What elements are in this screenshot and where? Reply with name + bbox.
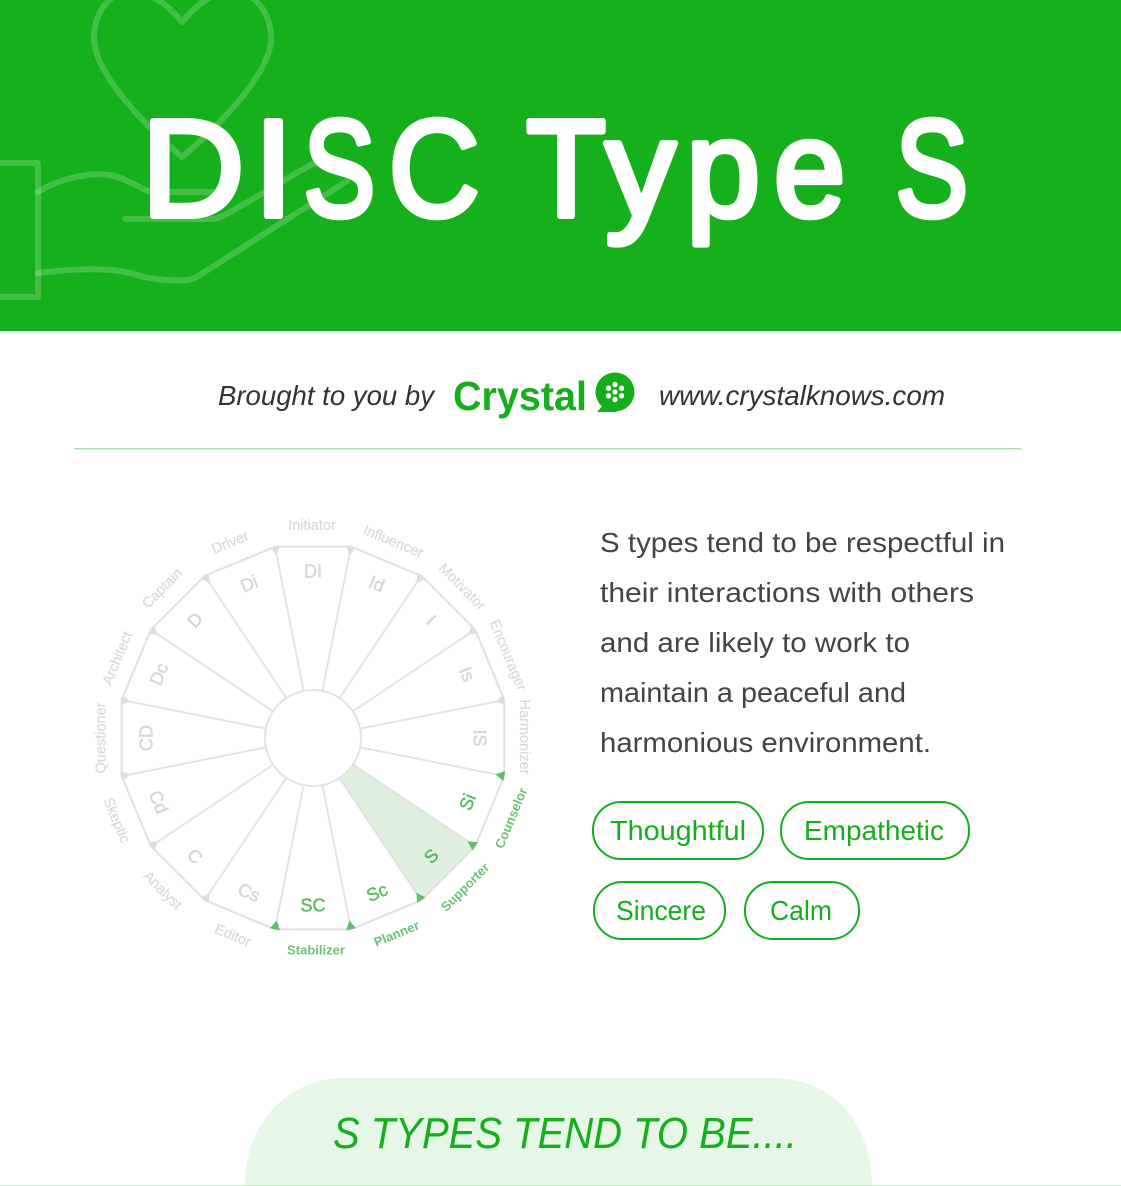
description paragraph: and are likely to work to (600, 627, 910, 658)
highlighted S segment (340, 765, 475, 900)
trait tag: Sincere (594, 882, 725, 939)
outer role labels: Encourager (486, 618, 529, 693)
header banner (0, 0, 1121, 331)
segment codes: Cs (235, 879, 263, 906)
trait tag: Calm: Calm (770, 895, 832, 926)
title: I (254, 92, 293, 246)
outer role labels: Analyst (140, 868, 185, 913)
segment codes: D (183, 608, 207, 632)
title: e (774, 92, 845, 246)
title: S (895, 92, 968, 246)
section heading tab (0, 1078, 1121, 1186)
wheel outline (122, 547, 504, 929)
outer role labels: Counselor (492, 785, 530, 851)
description paragraph: S types tend to be respectful in (600, 527, 1005, 558)
outer role labels: Initiator (288, 518, 336, 534)
outer role labels: Influencer (361, 522, 426, 562)
segment codes: Is (455, 664, 479, 685)
description paragraph: their interactions with others (600, 577, 974, 608)
wheel centre circle (265, 690, 361, 786)
outer role labels: Motivator (435, 561, 489, 614)
outer role labels: Stabilizer (287, 943, 345, 958)
segment codes: C (183, 845, 206, 868)
trait tag: Thoughtful (593, 802, 763, 859)
outer role labels: Questioner (94, 702, 110, 773)
segment codes: Di (238, 571, 261, 596)
trait tag: Thoughtful: Thoughtful (610, 815, 746, 846)
outer role labels: Skeptic (100, 795, 132, 845)
outer role labels: Editor (212, 921, 253, 951)
trait tag: Empathetic (781, 802, 969, 859)
title: S (303, 92, 375, 246)
description paragraph: maintain a peaceful and (600, 677, 906, 708)
website url: www.crystalknows.com (659, 380, 945, 411)
segment codes: Dc (146, 660, 172, 688)
logo wordmark: Crystal (453, 373, 587, 419)
title: C (389, 92, 480, 246)
title: D (141, 92, 244, 246)
segment codes: I (422, 611, 440, 629)
segment codes: DI (304, 561, 322, 581)
segment codes: Sc (363, 879, 391, 906)
trait tag: Sincere: Sincere (616, 895, 706, 926)
green vertex markers (270, 769, 505, 930)
title: T (526, 92, 606, 246)
icon: hand holding heart (0, 0, 347, 297)
description paragraph: harmonious environment. (600, 727, 931, 758)
title: y (606, 92, 676, 246)
segment codes: CD (136, 725, 156, 751)
outer role labels: Harmonizer (516, 700, 532, 775)
section heading text: S TYPES TEND TO BE.... (333, 1109, 797, 1158)
outer role labels: Planner (372, 917, 421, 950)
trait tag: Calm (745, 882, 859, 939)
segment codes: Si (455, 791, 480, 813)
segment codes: S (420, 845, 443, 868)
segment codes: SC (300, 895, 326, 915)
brought to you by line (218, 372, 945, 419)
DISC wheel chart (94, 518, 532, 958)
outer role labels: Captain (139, 565, 186, 612)
title: p (686, 92, 760, 246)
segment codes: IS (470, 729, 490, 747)
wheel spokes (122, 547, 504, 929)
outer role labels: Driver (209, 528, 251, 558)
icon: crystal speech bubble (596, 372, 634, 412)
outer role labels: Supporter (438, 860, 492, 914)
segment codes: Id (366, 572, 388, 596)
segment codes: Cd (145, 788, 172, 816)
description paragraph (600, 527, 1005, 758)
segment codes (136, 561, 490, 915)
trait tag: Empathetic: Empathetic (804, 815, 944, 846)
outer role labels: Architect (100, 629, 136, 688)
sponsor text: Brought to you by (218, 380, 436, 411)
outer role labels (94, 518, 532, 958)
grey vertex markers (121, 546, 505, 903)
